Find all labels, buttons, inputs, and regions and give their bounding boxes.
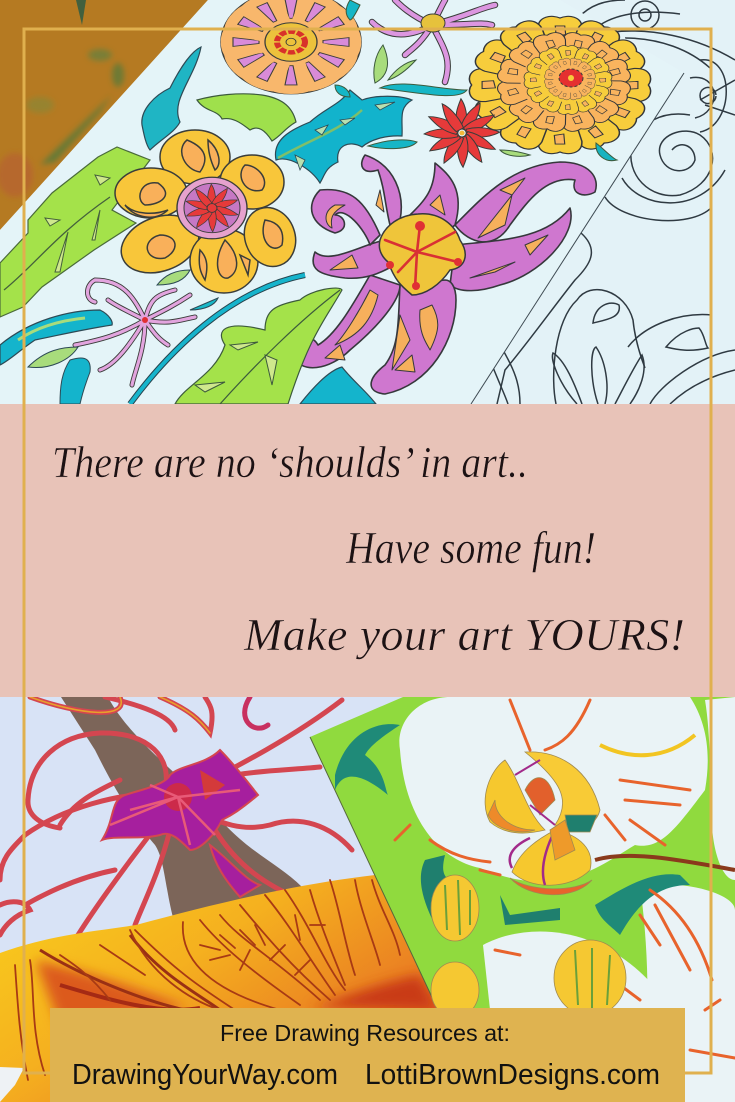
bottom photo: coloured artworks: [0, 697, 735, 1102]
icon: teal leaf top left: [142, 47, 201, 150]
icon: green leaf lower: [175, 288, 342, 404]
icon: purple star flower: [293, 155, 596, 394]
pale paper background: [0, 697, 402, 953]
green floral page: [310, 697, 735, 1102]
purple flower: [102, 750, 260, 897]
front coloured page: [0, 0, 654, 370]
icon: large green leaf left: [0, 147, 150, 317]
icon: yellow five petal flower: [113, 130, 304, 293]
flower buds: [431, 875, 626, 1018]
quote text: [52, 438, 685, 660]
icon: curved teal stem: [130, 275, 305, 404]
orange leaf painting: [0, 875, 445, 1102]
orchid flower: [485, 752, 600, 895]
icon: pink flower centre: [421, 14, 445, 32]
yellow crescent petal: [600, 735, 695, 755]
pink quote band: [0, 404, 735, 697]
icon: teal feathered leaf: [275, 90, 412, 183]
icon: yellow marigold: [469, 16, 651, 154]
icon: small pink flower: [75, 280, 195, 385]
background outline page: [0, 0, 735, 404]
icon: teal leaf bottom: [300, 367, 376, 404]
quote line 3: Make your art YOURS!: [243, 609, 685, 660]
icon: red spiky flower: [424, 99, 500, 167]
icon: orange flower: [220, 0, 362, 95]
quote line 1: There are no ‘shoulds’ in art..: [52, 438, 528, 487]
footer link one: DrawingYourWay.com: [72, 1059, 338, 1091]
icon: green leaf top: [197, 94, 296, 141]
right page line art swirls: [490, 0, 735, 404]
orange and yellow petal strokes: [395, 700, 735, 1058]
red tendrils: [0, 697, 352, 935]
top photo: coloured flower pages: [0, 0, 735, 404]
icon: purple flower yellow centre: [379, 214, 465, 295]
footer box: [50, 1008, 685, 1102]
icon: small green and teal leaves: [335, 0, 617, 161]
footer heading: Free Drawing Resources at:: [220, 1020, 510, 1046]
icon: teal leaf lower left: [0, 310, 112, 365]
footer link two: LottiBrownDesigns.com: [365, 1059, 660, 1091]
icon: flower centre pink and red: [177, 177, 247, 239]
brown trunk: [61, 697, 302, 925]
quote line 2: Have some fun!: [345, 522, 596, 573]
icon: small green and teal leaves lower left: [28, 270, 218, 404]
wooden table background: [0, 0, 208, 230]
icon: pink flower top: [372, 0, 495, 82]
